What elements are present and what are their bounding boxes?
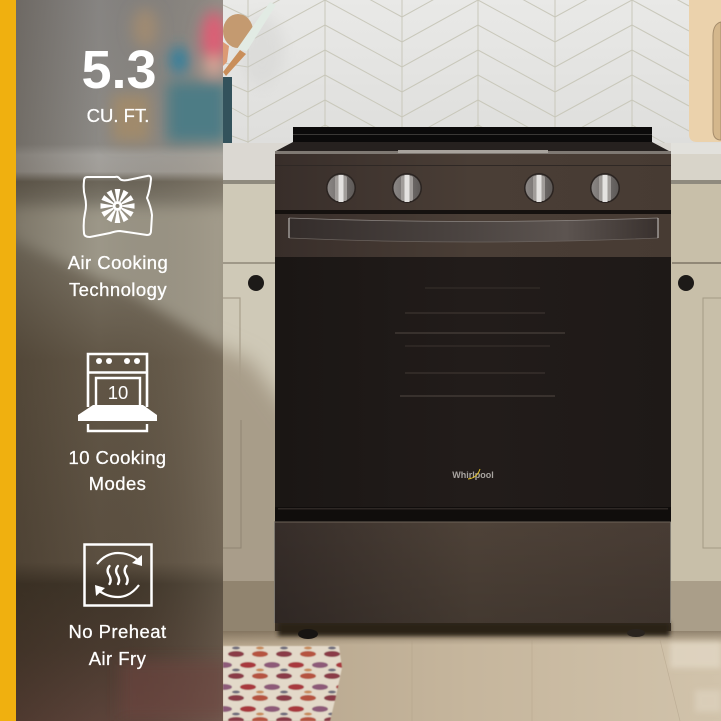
cabinets	[205, 184, 721, 640]
range	[274, 127, 671, 639]
icon: wavy square with fan	[84, 176, 152, 237]
oven window	[275, 257, 671, 508]
cutting board	[689, 0, 721, 142]
label: Air Cooking Technology: Air Cooking	[68, 252, 168, 273]
capacity stat	[81, 40, 157, 126]
door bottom vent	[275, 507, 671, 522]
Whirlpool logo: Whirlpool	[452, 470, 494, 480]
left cabinet	[223, 184, 275, 631]
capacity stat: 5.3	[81, 40, 157, 100]
control panel with knobs	[275, 154, 671, 214]
floor	[223, 620, 721, 721]
utensil crock	[223, 2, 276, 145]
blurred light patch on cabinet	[10, 208, 230, 352]
lower drawer	[274, 522, 671, 623]
range floor shadow and feet	[278, 622, 670, 639]
label: 10 Cooking Modes: 10 Cooking	[68, 447, 167, 468]
knob 1	[326, 173, 356, 203]
icon: square with circular arrows and heat	[84, 544, 152, 606]
label: 10 Cooking Modes: Modes	[89, 473, 146, 494]
cooktop	[275, 127, 671, 154]
capacity stat: CU. FT.	[87, 105, 149, 126]
accent bar	[0, 0, 16, 721]
oven door top and handle	[275, 214, 671, 258]
knob 2	[392, 173, 422, 203]
knob 3	[524, 173, 554, 203]
rug	[223, 646, 342, 721]
feature: cooking modes	[68, 354, 167, 494]
kitchen wall with chevron tile	[223, 0, 721, 146]
blurred rug shape	[120, 660, 230, 720]
label: No Preheat Air Fry: Air Fry	[89, 648, 147, 669]
label: No Preheat Air Fry: No Preheat	[68, 621, 167, 642]
knob 4	[590, 173, 620, 203]
label: Air Cooking Technology: Technology	[69, 279, 167, 300]
feature: no preheat air fry	[68, 544, 167, 669]
right cabinet	[671, 184, 721, 632]
countertop	[223, 143, 721, 184]
feature: air cooking	[68, 176, 168, 300]
icon: oven with 10: 10	[108, 382, 128, 403]
blurred utensils	[112, 8, 227, 142]
frosted side panel	[10, 0, 230, 721]
